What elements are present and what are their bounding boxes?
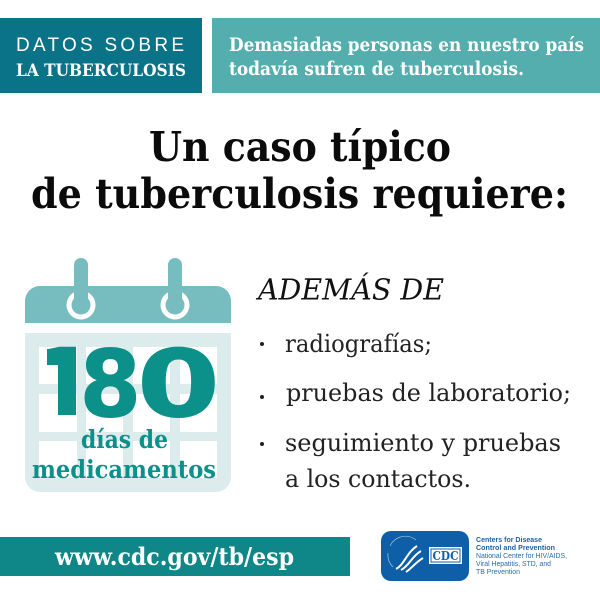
number 180 bbox=[47, 346, 215, 418]
CDC wordmark: CDC bbox=[432, 549, 458, 563]
title: Un caso típico bbox=[149, 123, 451, 171]
icon: HHS eagle emblem bbox=[388, 536, 423, 572]
list: additional requirements: pruebas de laboratorio; bbox=[286, 379, 571, 407]
calendar top bar with rings bbox=[25, 258, 231, 323]
list: additional requirements bbox=[260, 330, 571, 493]
header badge: Datos sobre la tuberculosis bbox=[0, 18, 202, 93]
header banner: message: todavía sufren de tuberculosis. bbox=[229, 58, 524, 80]
footer URL bar: www.cdc.gov/tb/esp bbox=[54, 542, 294, 571]
list: additional requirements: seguimiento y pruebas bbox=[285, 429, 561, 457]
header badge: Datos sobre la tuberculosis: DATOS SOBRE bbox=[16, 35, 184, 56]
CDC agency text: Centers for Disease bbox=[476, 537, 542, 544]
CDC logo bbox=[381, 531, 469, 581]
number 180: 8 bbox=[80, 331, 141, 439]
list: additional requirements: a los contactos. bbox=[285, 465, 471, 493]
title bbox=[31, 123, 568, 218]
calendar body grid bbox=[25, 333, 231, 492]
CDC agency text: National Center for HIV/AIDS, bbox=[476, 553, 567, 560]
number 180: 0 bbox=[137, 331, 220, 439]
CDC agency text bbox=[476, 537, 567, 576]
calendar graphic bbox=[25, 258, 231, 492]
CDC agency text: TB Prevention bbox=[476, 569, 520, 576]
caption: días de medicamentos bbox=[32, 425, 216, 484]
header badge: Datos sobre la tuberculosis: LA TUBERCULOSIS bbox=[16, 61, 186, 81]
caption: días de medicamentos: días de bbox=[81, 425, 168, 454]
footer URL bar bbox=[0, 537, 350, 576]
list: additional requirements: radiografías; bbox=[285, 330, 432, 358]
number 180: 1 bbox=[33, 329, 98, 437]
CDC agency text: Control and Prevention bbox=[476, 545, 555, 552]
caption: días de medicamentos: medicamentos bbox=[32, 455, 216, 484]
title: de tuberculosis requiere: bbox=[31, 170, 568, 218]
heading: además de: ADEMÁS DE bbox=[255, 272, 444, 306]
CDC agency text: Viral Hepatitis, STD, and bbox=[476, 561, 551, 568]
header banner: message bbox=[212, 18, 600, 93]
